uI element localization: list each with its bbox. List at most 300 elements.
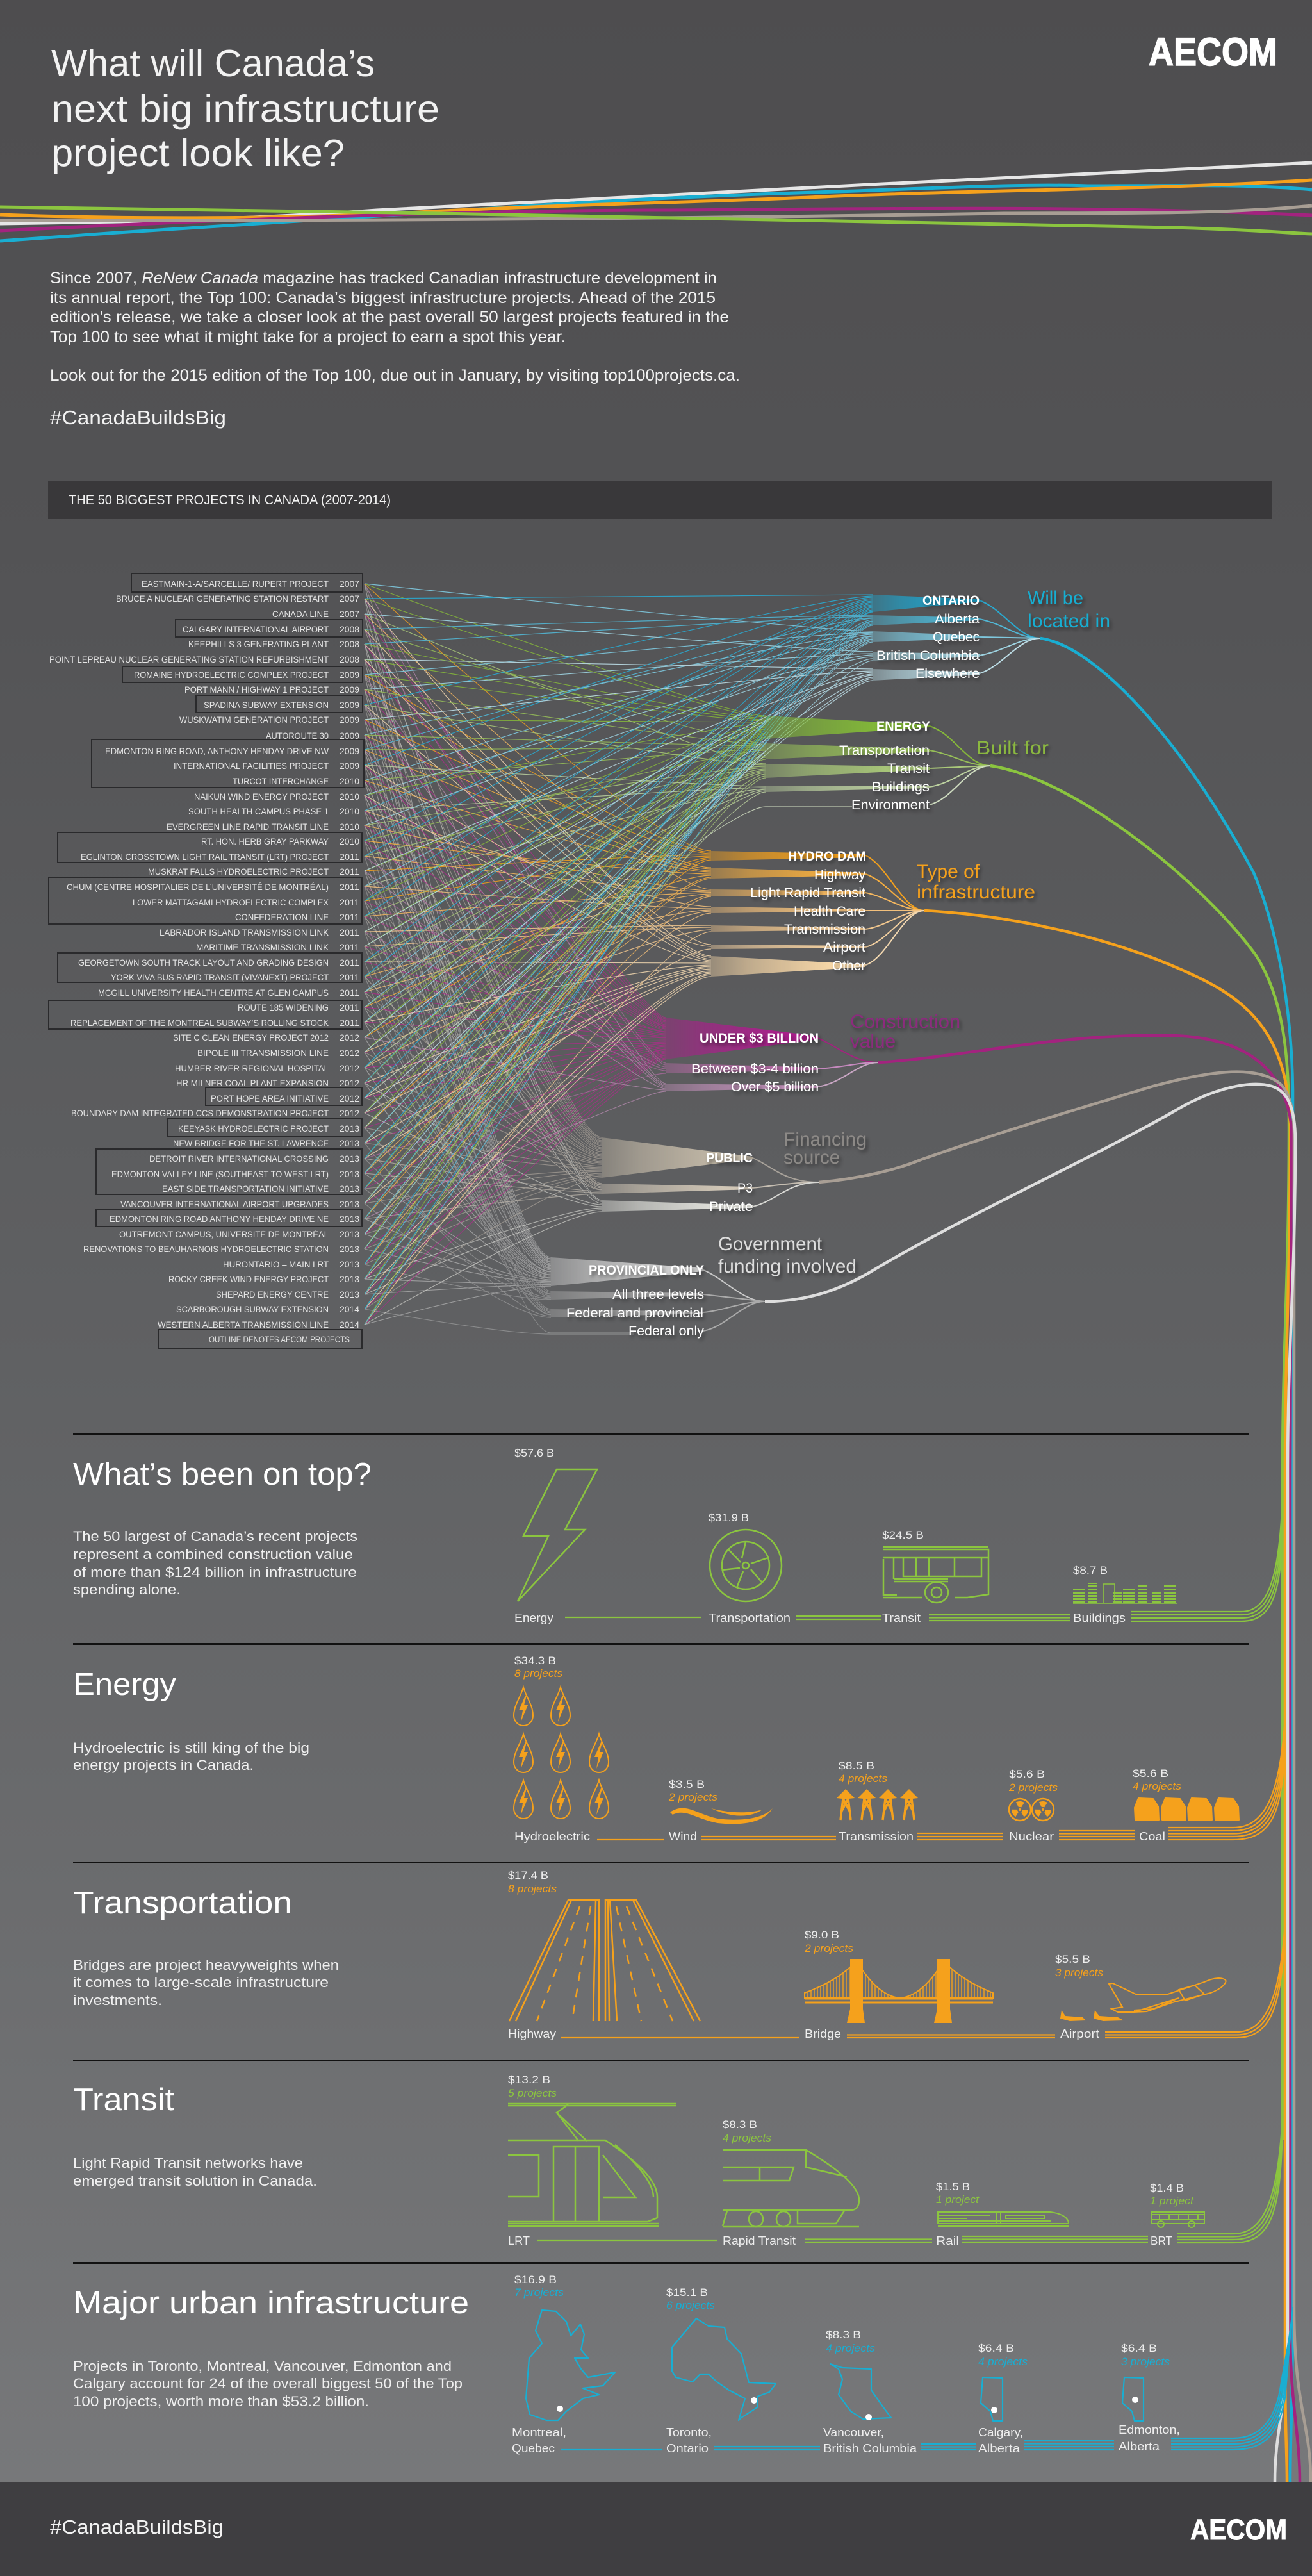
section header bar: THE 50 BIGGEST PROJECTS IN CANADA (2007-2014): [69, 493, 391, 508]
project list with years: GEORGETOWN SOUTH TRACK LAYOUT AND GRADING DESIGN: [78, 957, 329, 968]
government funding group: [566, 1234, 857, 1339]
icon: Alberta map with Edmonton: [1122, 2377, 1144, 2421]
financing source group: Private: [709, 1200, 753, 1214]
city labels: Calgary,: [978, 2426, 1023, 2439]
values and counts: 1 project: [936, 2193, 980, 2206]
construction value group: Over $5 billion: [731, 1080, 819, 1094]
project list with years: 2013: [340, 1138, 359, 1148]
category labels: Buildings: [1073, 1612, 1126, 1624]
description: Bridges are project heavyweights when: [73, 1957, 339, 1973]
section rules: [73, 1433, 1249, 2264]
project list with years: 2011: [340, 957, 359, 968]
values: $24.5 B: [882, 1529, 924, 1541]
project list with years: HR MILNER COAL PLANT EXPANSION: [176, 1078, 329, 1088]
project list with years: DETROIT RIVER INTERNATIONAL CROSSING: [149, 1153, 329, 1164]
project list with years: CANADA LINE: [272, 609, 329, 619]
project connection mesh: [365, 584, 873, 1334]
city labels: Edmonton,: [1119, 2423, 1180, 2436]
heading: Transportation: [73, 1886, 292, 1920]
built for group: Built for: [976, 738, 1049, 759]
government funding group: Federal only: [628, 1324, 705, 1339]
values: $8.7 B: [1073, 1564, 1108, 1576]
category labels: [514, 1830, 1165, 1843]
financing source group: source: [783, 1147, 840, 1168]
project list with years: WESTERN ALBERTA TRANSMISSION LINE: [158, 1319, 329, 1330]
project list with years: SITE C CLEAN ENERGY PROJECT 2012: [173, 1032, 329, 1043]
values and counts: $3.5 B: [669, 1778, 705, 1790]
project list with years: BOUNDARY DAM INTEGRATED CCS DEMONSTRATION PROJECT: [71, 1108, 329, 1118]
project list with years: 2012: [340, 1108, 359, 1118]
project list with years: ROUTE 185 WIDENING: [238, 1002, 329, 1012]
values and counts: $15.1 B: [666, 2286, 708, 2299]
connector lines orange: [597, 1717, 1285, 1840]
project list with years: 2014: [340, 1319, 359, 1330]
description: [73, 1957, 339, 2008]
outline boxes: AECOM projects: [49, 574, 364, 1348]
project list with years: 2011: [340, 897, 359, 907]
group labels with shadows: [566, 588, 1110, 1339]
intro text: its annual report, the Top 100: Canada’s biggest infrastructure projects. Ahead of the 2015: [50, 289, 716, 307]
description: it comes to large-scale infrastructure: [73, 1974, 329, 1990]
heading: What’s been on top?: [73, 1457, 372, 1492]
connector lines orange: [561, 1922, 1285, 2038]
intro text: [50, 269, 740, 384]
city labels: Quebec: [512, 2442, 555, 2455]
project list with years: 2011: [340, 852, 359, 862]
values and counts: $5.6 B: [1009, 1768, 1045, 1780]
project list with years: TURCOT INTERCHANGE: [233, 776, 329, 786]
description: spending alone.: [73, 1581, 181, 1598]
icon: British Columbia map: [830, 2364, 891, 2420]
built for group: [839, 719, 1049, 813]
government funding group: funding involved: [718, 1256, 857, 1277]
feeder lines into junctions: [703, 600, 1040, 1331]
icon: hydro drops: [514, 1687, 609, 1819]
project list with years: SPADINA SUBWAY EXTENSION: [204, 700, 329, 710]
government funding group: Federal and provincial: [566, 1306, 703, 1321]
project list with years: KEEYASK HYDROELECTRIC PROJECT: [178, 1123, 329, 1134]
category labels: Transportation: [709, 1612, 791, 1624]
values and counts: $9.0 B: [805, 1929, 839, 1941]
project list with years: HURONTARIO – MAIN LRT: [223, 1259, 329, 1269]
project list with years: SCARBOROUGH SUBWAY EXTENSION: [176, 1304, 329, 1314]
icon: wind swoosh: [670, 1808, 773, 1824]
values and counts: 4 projects: [826, 2342, 876, 2354]
type of infrastructure group: Light Rapid Transit: [750, 886, 865, 900]
title: project look like?: [51, 132, 345, 174]
category labels: [508, 2234, 1172, 2247]
project list with years: EDMONTON VALLEY LINE (SOUTHEAST TO WEST LRT): [111, 1169, 329, 1179]
category labels: Nuclear: [1009, 1830, 1054, 1843]
category labels: Bridge: [805, 2027, 841, 2040]
project list with years: KEEPHILLS 3 GENERATING PLANT: [188, 639, 329, 649]
icon: Alberta map with Calgary: [981, 2377, 1003, 2421]
project list with years: EVERGREEN LINE RAPID TRANSIT LINE: [167, 822, 329, 832]
city labels: Vancouver,: [823, 2426, 884, 2439]
project list with years: POINT LEPREAU NUCLEAR GENERATING STATION REFURBISHMENT: [49, 654, 329, 665]
description: of more than $124 billion in infrastructure: [73, 1564, 357, 1580]
category labels: Wind: [669, 1830, 697, 1843]
icon: airplanes: [1060, 1978, 1226, 2021]
values and counts: 8 projects: [514, 1667, 563, 1680]
project list with years: 2013: [340, 1274, 359, 1284]
project list with years: 2011: [340, 972, 359, 982]
project list with years: 2012: [340, 1063, 359, 1073]
values and counts: $16.9 B: [514, 2274, 557, 2286]
city labels: [512, 2423, 1180, 2455]
project list with years: 2009: [340, 700, 359, 710]
title: next big infrastructure: [51, 88, 439, 130]
description: [73, 1740, 309, 1773]
project list with years: RT. HON. HERB GRAY PARKWAY: [201, 836, 329, 846]
values and counts: $5.6 B: [1133, 1767, 1168, 1779]
values and counts: $8.3 B: [723, 2118, 757, 2131]
project list with years: LOWER MATTAGAMI HYDROELECTRIC COMPLEX: [133, 897, 329, 907]
icon: commuter rail: [938, 2212, 1069, 2226]
project list with years: NEW BRIDGE FOR THE ST. LAWRENCE: [173, 1138, 329, 1148]
project list with years: 2012: [340, 1032, 359, 1043]
description: The 50 largest of Canada’s recent projects: [73, 1528, 357, 1544]
project list with years: 2013: [340, 1259, 359, 1269]
values and counts: $1.5 B: [936, 2181, 970, 2193]
built for group: Transit: [887, 761, 930, 776]
project list with years: EDMONTON RING ROAD, ANTHONY HENDAY DRIVE NW: [105, 746, 329, 756]
government funding group: All three levels: [612, 1287, 704, 1302]
icon: bus: [883, 1547, 988, 1603]
construction value group: UNDER $3 BILLION: [700, 1031, 819, 1046]
built for group: Environment: [851, 798, 930, 813]
city labels: Alberta: [978, 2442, 1021, 2455]
connector lines green: [565, 1493, 1283, 1621]
construction value group: [691, 1011, 960, 1094]
category labels: Highway: [508, 2027, 556, 2040]
heading: Transit: [73, 2083, 174, 2117]
intro text: Look out for the 2015 edition of the Top 100, due out in January, by visiting top100projects.ca.: [50, 367, 740, 384]
project list with years: EAST SIDE TRANSPORTATION INITIATIVE: [162, 1184, 329, 1194]
project list with years: VANCOUVER INTERNATIONAL AIRPORT UPGRADES: [120, 1199, 329, 1209]
project list with years: 2010: [340, 776, 359, 786]
location group: ONTARIO: [922, 593, 980, 608]
project list with years: 2007: [340, 579, 359, 589]
built for group: Transportation: [839, 743, 930, 758]
description: emerged transit solution in Canada.: [73, 2173, 317, 2189]
project list with years: 2013: [340, 1184, 359, 1194]
panel: transportation: [73, 1869, 1285, 2040]
values and counts: [508, 1869, 1104, 1979]
city labels: Ontario: [666, 2442, 709, 2455]
project list with years: 2008: [340, 624, 359, 634]
project list with years: MARITIME TRANSMISSION LINK: [196, 942, 329, 952]
footer hashtag: #CanadaBuildsBig: [50, 2516, 224, 2538]
category labels: [514, 1612, 1126, 1624]
description: Projects in Toronto, Montreal, Vancouver, Edmonton and: [73, 2358, 452, 2374]
panel: what's been on top: [73, 1447, 1283, 1624]
values and counts: 4 projects: [723, 2132, 772, 2144]
values: $31.9 B: [709, 1512, 749, 1524]
section header bar: [48, 481, 1272, 519]
project list with years: 2013: [340, 1244, 359, 1254]
heading: Energy: [73, 1667, 177, 1702]
project list with years: 2013: [340, 1199, 359, 1209]
project list with years: 2011: [340, 942, 359, 952]
project list with years: BIPOLE III TRANSMISSION LINE: [197, 1048, 329, 1058]
type of infrastructure group: [750, 849, 1035, 973]
built for group: Buildings: [872, 780, 930, 795]
project list with years: YORK VIVA BUS RAPID TRANSIT (VIVANEXT) PROJECT: [111, 972, 329, 982]
project list with years: PORT MANN / HIGHWAY 1 PROJECT: [184, 684, 329, 695]
values and counts: $13.2 B: [508, 2074, 550, 2086]
values and counts: 2 projects: [668, 1791, 718, 1803]
panel: energy: [73, 1655, 1285, 1843]
intro text: Top 100 to see what it might take for a project to earn a spot this year.: [50, 328, 566, 346]
type of infrastructure group: infrastructure: [917, 882, 1035, 903]
project list with years: 2012: [340, 1078, 359, 1088]
panel: major urban infrastructure: [73, 2274, 1293, 2455]
values and counts: [508, 2074, 1194, 2207]
icon: suspension bridge: [805, 1959, 993, 2023]
values and counts: [514, 1655, 1182, 1803]
description: Light Rapid Transit networks have: [73, 2155, 303, 2171]
project list with years: REPLACEMENT OF THE MONTREAL SUBWAY’S ROLLING STOCK: [70, 1018, 329, 1028]
project list with years: EASTMAIN-1-A/SARCELLE/ RUPERT PROJECT: [142, 579, 329, 589]
legend note: OUTLINE DENOTES AECOM PROJECTS: [209, 1334, 350, 1344]
values and counts: 6 projects: [666, 2299, 716, 2311]
intro text: Since 2007, ReNew Canada magazine has tracked Canadian infrastructure development in: [50, 269, 717, 287]
project list with years: 2009: [340, 731, 359, 741]
project list with years: 2011: [340, 1002, 359, 1012]
description: Hydroelectric is still king of the big: [73, 1740, 309, 1756]
type of infrastructure group: HYDRO DAM: [788, 849, 866, 864]
description: represent a combined construction value: [73, 1546, 353, 1562]
values and counts: $6.4 B: [978, 2342, 1014, 2354]
city labels: British Columbia: [823, 2442, 917, 2455]
category labels: Rapid Transit: [723, 2234, 796, 2247]
construction value group: value: [850, 1031, 896, 1052]
values and counts: 8 projects: [508, 1883, 557, 1895]
values and counts: $34.3 B: [514, 1655, 556, 1667]
category labels: Coal: [1139, 1830, 1165, 1843]
city labels: Toronto,: [666, 2426, 712, 2439]
project list with years: 2011: [340, 1018, 359, 1028]
category labels: Transit: [882, 1612, 921, 1624]
type of infrastructure group: Transmission: [784, 922, 865, 937]
category labels: Hydroelectric: [514, 1830, 590, 1843]
icon: small bus: [1151, 2212, 1204, 2227]
panel: transit: [73, 2074, 1283, 2247]
project list with years: ROMAINE HYDROELECTRIC COMPLEX PROJECT: [134, 670, 329, 680]
values and counts: 7 projects: [514, 2286, 564, 2299]
project list with years: SOUTH HEALTH CAMPUS PHASE 1: [188, 806, 329, 816]
project list with years: [49, 579, 359, 1330]
values and counts: [514, 2274, 1170, 2368]
title: [51, 42, 439, 174]
type of infrastructure group: Type of: [917, 861, 980, 882]
hashtag: #CanadaBuildsBig: [50, 406, 226, 429]
project list with years: CALGARY INTERNATIONAL AIRPORT: [183, 624, 329, 634]
main sweeping category curves: [765, 638, 1311, 2482]
values and counts: $6.4 B: [1121, 2342, 1157, 2354]
icon: highway: [509, 1900, 700, 2021]
project list with years: 2012: [340, 1093, 359, 1103]
icon: wheel: [710, 1530, 782, 1601]
construction value group: Between $3-4 billion: [691, 1062, 819, 1077]
band wedges: [551, 595, 980, 1317]
project list with years: 2007: [340, 609, 359, 619]
project list with years: AUTOROUTE 30: [266, 731, 329, 741]
icon: Quebec map: [526, 2310, 615, 2420]
category labels: Rail: [936, 2234, 959, 2247]
project list with years: PORT HOPE AREA INITIATIVE: [211, 1093, 329, 1103]
values and counts: 2 projects: [1008, 1781, 1058, 1794]
project list with years: INTERNATIONAL FACILITIES PROJECT: [174, 761, 329, 771]
financing source group: Financing: [783, 1129, 867, 1150]
description: 100 projects, worth more than $53.2 billion.: [73, 2393, 369, 2409]
values and counts: 3 projects: [1121, 2356, 1170, 2368]
project list with years: 2010: [340, 806, 359, 816]
description: energy projects in Canada.: [73, 1757, 254, 1773]
project list with years: CHUM (CENTRE HOSPITALIER DE L’UNIVERSITÉ DE MONTRÉAL): [67, 882, 329, 892]
icon: transmission towers: [837, 1789, 918, 1820]
icon: city buildings: [1073, 1583, 1177, 1603]
type of infrastructure group: Health Care: [794, 904, 865, 919]
financing source group: PUBLIC: [706, 1151, 753, 1166]
values and counts: 2 projects: [804, 1942, 854, 1954]
project list with years: EGLINTON CROSSTOWN LIGHT RAIL TRANSIT (LRT) PROJECT: [81, 852, 329, 862]
description: [73, 1528, 357, 1598]
project list with years: CONFEDERATION LINE: [235, 912, 329, 922]
values and counts: 5 projects: [508, 2087, 557, 2099]
construction value group: Construction: [850, 1011, 960, 1032]
project list with years: 2009: [340, 761, 359, 771]
city labels: Montreal,: [512, 2426, 566, 2439]
project list with years: 2009: [340, 714, 359, 725]
location group: Elsewhere: [915, 666, 980, 681]
project list with years: 2008: [340, 639, 359, 649]
footer band: [0, 2482, 1312, 2576]
project list with years: 2011: [340, 987, 359, 998]
title: What will Canada’s: [51, 42, 375, 85]
values and counts: 1 project: [1150, 2195, 1194, 2207]
footer AECOM logo: AECOM: [1190, 2513, 1287, 2546]
project list with years: 2011: [340, 866, 359, 877]
values and counts: $8.3 B: [826, 2329, 861, 2341]
project list with years: OUTREMONT CAMPUS, UNIVERSITÉ DE MONTRÉAL: [119, 1229, 329, 1239]
project list with years: MCGILL UNIVERSITY HEALTH CENTRE AT GLEN CAMPUS: [98, 987, 329, 998]
AECOM logo: AECOM: [1149, 30, 1277, 74]
government funding group: PROVINCIAL ONLY: [589, 1263, 704, 1278]
project list with years: NAIKUN WIND ENERGY PROJECT: [194, 791, 329, 802]
location group: located in: [1028, 611, 1110, 632]
location group: Quebec: [933, 630, 980, 645]
location group: British Columbia: [876, 648, 980, 663]
project list with years: 2014: [340, 1304, 359, 1314]
project list with years: 2010: [340, 836, 359, 846]
colour ribbon lines: [0, 163, 1312, 241]
project list with years: 2012: [340, 1048, 359, 1058]
description: Calgary account for 24 of the overall biggest 50 of the Top: [73, 2375, 463, 2391]
icon: rapid transit train: [723, 2150, 859, 2227]
location group: Will be: [1028, 588, 1083, 609]
values and counts: $5.5 B: [1055, 1953, 1090, 1965]
project list with years: 2013: [340, 1214, 359, 1224]
location group: Alberta: [935, 612, 980, 627]
project list with years: 2010: [340, 822, 359, 832]
project list with years: ROCKY CREEK WIND ENERGY PROJECT: [168, 1274, 329, 1284]
project list with years: 2013: [340, 1229, 359, 1239]
project list with years: LABRADOR ISLAND TRANSMISSION LINK: [160, 927, 329, 937]
type of infrastructure group: Highway: [814, 868, 865, 882]
connector lines cyan: [561, 2307, 1293, 2450]
values and counts: $8.5 B: [839, 1760, 874, 1772]
values: $57.6 B: [514, 1447, 554, 1459]
project list with years: 2009: [340, 746, 359, 756]
project list with years: 2013: [340, 1123, 359, 1134]
project list with years: 2013: [340, 1289, 359, 1300]
values and counts: 4 projects: [1133, 1780, 1182, 1792]
government funding group: Government: [718, 1234, 823, 1255]
heading: Major urban infrastructure: [73, 2286, 469, 2320]
values and counts: $1.4 B: [1150, 2182, 1184, 2194]
project list with years: 2013: [340, 1153, 359, 1164]
type of infrastructure group: Airport: [823, 940, 865, 955]
project list with years: 2011: [340, 882, 359, 892]
description: [73, 2358, 463, 2409]
project list with years: 2011: [340, 912, 359, 922]
connector lines green: [537, 2115, 1283, 2243]
category labels: Energy: [514, 1612, 554, 1624]
project list with years: SHEPARD ENERGY CENTRE: [216, 1289, 329, 1300]
icon: Ontario map: [672, 2318, 776, 2420]
project list with years: 2008: [340, 654, 359, 665]
project list with years: 2009: [340, 670, 359, 680]
values: [514, 1447, 1108, 1576]
category labels: BRT: [1151, 2234, 1172, 2247]
description: investments.: [73, 1992, 162, 2008]
project list with years: 2007: [340, 593, 359, 604]
category labels: Transmission: [839, 1830, 914, 1843]
project list with years: 2011: [340, 927, 359, 937]
intro text: edition’s release, we take a closer look at the past overall 50 largest projects featured in the: [50, 308, 729, 326]
project list with years: RENOVATIONS TO BEAUHARNOIS HYDROELECTRIC STATION: [83, 1244, 329, 1254]
icon: nuclear symbols: [1009, 1799, 1054, 1821]
icon: coal lumps: [1135, 1798, 1239, 1820]
built for group: ENERGY: [876, 719, 930, 734]
project list with years: HUMBER RIVER REGIONAL HOSPITAL: [175, 1063, 329, 1073]
project list with years: WUSKWATIM GENERATION PROJECT: [179, 714, 329, 725]
project list with years: 2013: [340, 1169, 359, 1179]
project list with years: 2009: [340, 684, 359, 695]
category labels: [508, 2027, 1099, 2040]
icon: lightning bolt: [518, 1469, 597, 1601]
values and counts: 4 projects: [978, 2356, 1028, 2368]
project list with years: EDMONTON RING ROAD ANTHONY HENDAY DRIVE NE: [110, 1214, 329, 1224]
category labels: LRT: [508, 2234, 530, 2247]
financing source group: [706, 1129, 867, 1214]
type of infrastructure group: Other: [832, 959, 865, 973]
values and counts: 3 projects: [1055, 1967, 1104, 1979]
description: [73, 2155, 317, 2189]
city labels: Alberta: [1119, 2440, 1160, 2453]
icon: LRT train: [508, 2104, 676, 2226]
category labels: Airport: [1060, 2027, 1099, 2040]
project list with years: BRUCE A NUCLEAR GENERATING STATION RESTART: [116, 593, 329, 604]
project list with years: 2010: [340, 791, 359, 802]
location group: [876, 588, 1110, 681]
financing source group: P3: [737, 1181, 753, 1196]
values and counts: 4 projects: [839, 1772, 888, 1785]
project list with years: MUSKRAT FALLS HYDROELECTRIC PROJECT: [148, 866, 329, 877]
values and counts: $17.4 B: [508, 1869, 548, 1881]
